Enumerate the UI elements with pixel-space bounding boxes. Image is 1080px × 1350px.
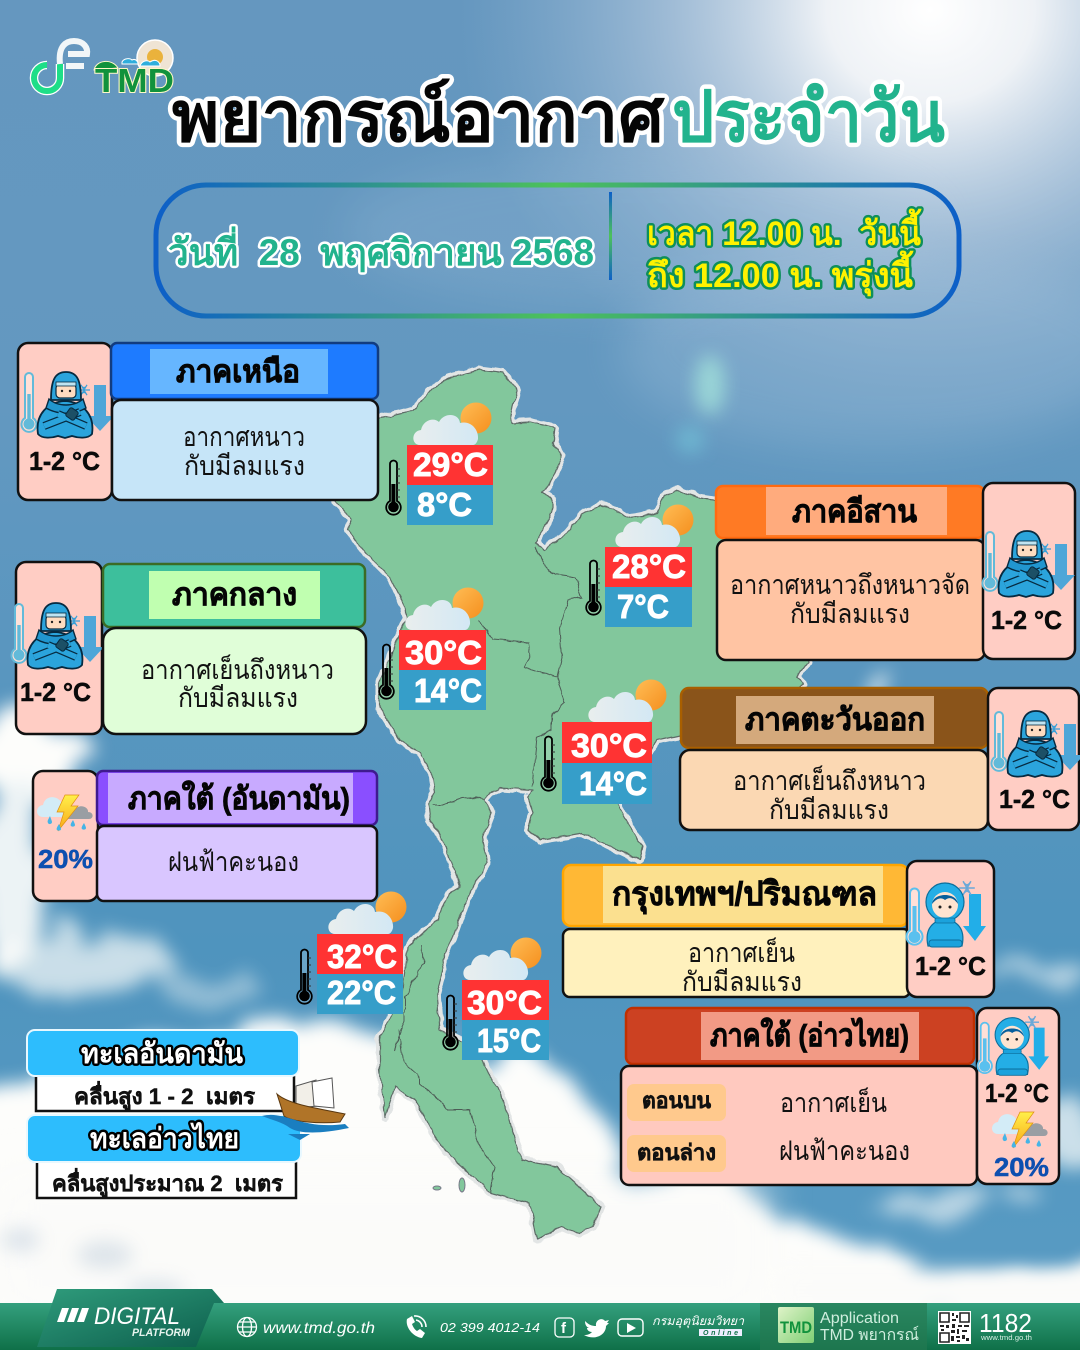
map of Thailand bbox=[335, 370, 808, 1240]
panel: central bbox=[12, 562, 366, 734]
phone: 02 399 4012-14 bbox=[440, 1320, 540, 1335]
sea conditions: Andaman: ทะเลอันดามัน bbox=[81, 1038, 243, 1069]
time range bbox=[647, 208, 922, 297]
website bbox=[238, 1318, 375, 1337]
panel: east bbox=[680, 688, 1080, 830]
panel: Bangkok and vicinity: อากาศเย็น bbox=[688, 935, 795, 968]
panel: south Gulf of Thailand: ฝนฟ้าคะนอง bbox=[779, 1136, 910, 1166]
temperature: north: 8°C bbox=[417, 486, 472, 523]
social icons bbox=[555, 1318, 643, 1337]
sea conditions: Gulf of Thailand bbox=[27, 1115, 301, 1198]
digital platform badge bbox=[37, 1289, 224, 1347]
panel: south Gulf of Thailand: ภาคใต้ (อ่าวไทย) bbox=[710, 1017, 909, 1053]
date: วันที่ 28 พฤศจิกายน 2568 bbox=[168, 226, 594, 273]
app promotion: TMD พยากรณ์ bbox=[820, 1325, 919, 1344]
hotline 1182: 1182 bbox=[979, 1308, 1032, 1338]
temperature: south west: 32°C bbox=[327, 938, 397, 975]
digital platform badge: PLATFORM bbox=[132, 1327, 191, 1339]
sea conditions: Andaman bbox=[27, 1030, 299, 1111]
sea conditions: Andaman: คลื่นสูง 1 - 2 เมตร bbox=[74, 1080, 255, 1111]
panel: northeast: ภาคอีสาน bbox=[792, 494, 917, 529]
temperature: south west bbox=[297, 892, 406, 1014]
temperature: south east: 30°C bbox=[467, 984, 542, 1021]
panel: central: กับมีลมแรง bbox=[178, 683, 298, 713]
date and time pill bbox=[156, 185, 959, 316]
app promotion: TMD bbox=[780, 1318, 812, 1337]
title bbox=[172, 78, 945, 156]
time range: เวลา 12.00 น. วันนี้ bbox=[647, 208, 922, 253]
panel: central: อากาศเย็นถึงหนาว bbox=[141, 652, 334, 685]
panel: east: กับมีลมแรง bbox=[769, 795, 889, 825]
panel: Bangkok and vicinity bbox=[563, 861, 994, 997]
panel: south Gulf of Thailand: ตอนบน bbox=[642, 1088, 711, 1113]
panel: south Andaman: ภาคใต้ (อันดามัน) bbox=[128, 780, 350, 816]
panel: south Andaman: 20% bbox=[38, 844, 93, 874]
department name: กรมอุตุนิยมวิทยา bbox=[652, 1314, 745, 1329]
panel: north: ภาคเหนือ bbox=[176, 354, 300, 389]
temperature: north bbox=[386, 402, 493, 525]
panel: north: อากาศหนาว bbox=[183, 422, 305, 452]
temperature: central: 14°C bbox=[414, 672, 482, 709]
sea conditions: Gulf of Thailand: คลื่นสูงประมาณ 2 เมตร bbox=[52, 1167, 283, 1198]
panel: central: ภาคกลาง bbox=[172, 577, 297, 612]
title: พยากรณ์อากาศ bbox=[172, 78, 666, 156]
panel: south Andaman bbox=[33, 771, 377, 901]
panel: north bbox=[18, 343, 378, 500]
sea conditions: Gulf of Thailand: ทะเลอ่าวไทย bbox=[90, 1122, 239, 1154]
panel: south Andaman: ฝนฟ้าคะนอง bbox=[168, 847, 299, 877]
QR code bbox=[938, 1311, 971, 1344]
hotline 1182: www.tmd.go.th bbox=[980, 1335, 1032, 1342]
panel: east: ภาคตะวันออก bbox=[745, 702, 925, 737]
phone bbox=[407, 1316, 540, 1338]
app promotion: Application bbox=[820, 1310, 899, 1327]
temperature: central bbox=[379, 588, 486, 710]
department name bbox=[652, 1314, 745, 1337]
website: www.tmd.go.th bbox=[263, 1320, 375, 1337]
panel: northeast: กับมีลมแรง bbox=[790, 599, 910, 629]
department name: Online bbox=[703, 1330, 738, 1337]
temperature: northeast bbox=[586, 504, 694, 627]
logo: TMD: TMD bbox=[95, 62, 174, 99]
panel: Bangkok and vicinity: กรุงเทพฯ/ปริมณฑล bbox=[612, 875, 877, 915]
temperature: south west: 22°C bbox=[327, 974, 396, 1011]
panel: south Gulf of Thailand: อากาศเย็น bbox=[780, 1085, 887, 1118]
logo: TMD bbox=[94, 40, 174, 99]
panel: north: 1-2 °C bbox=[29, 446, 100, 476]
panel: north: กับมีลมแรง bbox=[184, 451, 305, 481]
panel: south Gulf of Thailand bbox=[621, 1008, 1059, 1185]
panel: east: 1-2 °C bbox=[999, 784, 1070, 814]
panel: south Gulf of Thailand: ตอนล่าง bbox=[637, 1140, 716, 1165]
panel: Bangkok and vicinity: 1-2 °C bbox=[915, 951, 986, 981]
footer bar bbox=[0, 1289, 1080, 1350]
temperature: northeast: 7°C bbox=[617, 588, 669, 625]
temperature: east bbox=[541, 680, 666, 804]
panel: south Gulf of Thailand: 20% bbox=[994, 1152, 1049, 1182]
temperature: northeast: 28°C bbox=[612, 548, 686, 585]
temperature: central: 30°C bbox=[405, 634, 482, 671]
social icons: f bbox=[561, 1320, 567, 1337]
app promotion bbox=[760, 1303, 927, 1350]
logo: digital e bbox=[34, 41, 87, 91]
panel: northeast bbox=[716, 483, 1075, 660]
temperature: east: 30°C bbox=[571, 727, 647, 764]
temperature: east: 14°C bbox=[579, 765, 647, 802]
panel: northeast: อากาศหนาวถึงหนาวจัด bbox=[730, 570, 970, 600]
divider bbox=[609, 192, 612, 280]
temperature: north: 29°C bbox=[413, 446, 488, 483]
panel: central: 1-2 °C bbox=[20, 677, 91, 707]
temperature: south east: 15°C bbox=[477, 1022, 541, 1059]
digital platform badge: DIGITAL bbox=[94, 1303, 180, 1330]
icon: ship bbox=[262, 1078, 349, 1140]
temperature: south east bbox=[443, 938, 549, 1060]
panel: Bangkok and vicinity: กับมีลมแรง bbox=[682, 967, 802, 997]
panel: south Gulf of Thailand: 1-2 °C bbox=[985, 1078, 1049, 1108]
panel: northeast: 1-2 °C bbox=[991, 605, 1062, 635]
time range: ถึง 12.00 น. พรุ่งนี้ bbox=[647, 250, 914, 297]
panel: east: อากาศเย็นถึงหนาว bbox=[733, 763, 926, 796]
title: ประจำวัน bbox=[672, 78, 945, 156]
